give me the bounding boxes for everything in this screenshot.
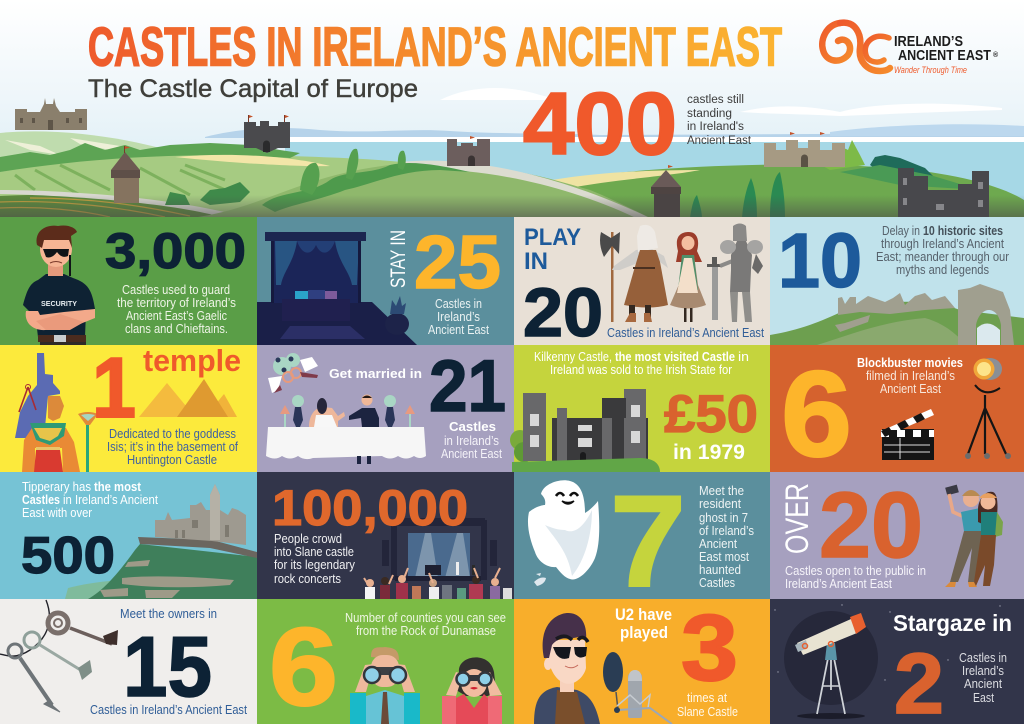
- icon: four-poster bed: [257, 232, 417, 345]
- icon: dark castle: [244, 115, 290, 153]
- text: meet the ghost: resident: [699, 497, 741, 511]
- trees: right: [812, 140, 865, 170]
- icon: mid castle: [447, 136, 490, 166]
- label: U2 have played: played: [620, 623, 668, 642]
- stat: 400 castles: in Ireland's: [687, 121, 744, 133]
- panel: stay in 25: [257, 217, 514, 345]
- icon: woman with binoculars: [442, 657, 502, 724]
- text: number of counties: from the Rock of Dunamase: [356, 624, 496, 638]
- panel: 7 ghosts: [514, 468, 770, 614]
- text: castles: Castles in: [435, 297, 482, 311]
- text: times at Slane Castle: Slane Castle: [677, 705, 738, 719]
- text: Kilkenny Castle: Ireland was sold to the Irish State for: [550, 363, 732, 377]
- text: castles in ireland's ancient east: Castles in Ireland’s Ancient East: [607, 326, 764, 340]
- stat: 400 castles: 400: [523, 74, 677, 173]
- text: delay in historic sites: 10 historic sites: [923, 224, 1003, 238]
- stat: 20: 20: [523, 274, 603, 351]
- text: number of counties: Number of counties you can see: [345, 611, 506, 625]
- logo: ®: [993, 51, 999, 59]
- hill: back left: [0, 131, 170, 175]
- clouds: [440, 88, 1002, 116]
- text: people crowd: People crowd: [274, 532, 342, 546]
- icon: maid: [670, 232, 706, 322]
- hedges: top: [0, 143, 300, 172]
- illustration: ruins on hill: [770, 284, 1024, 345]
- text: delay in historic sites: [876, 224, 1009, 277]
- icon: film light on tripod: [965, 358, 1011, 459]
- text: delay in historic sites: Delay in: [882, 224, 920, 238]
- stat: 1: 1: [92, 341, 136, 436]
- text: blockbuster movies: [857, 356, 963, 396]
- label: temple: temple: [143, 343, 241, 378]
- stat: 100,000: 100,000: [272, 480, 468, 536]
- text: Tipperary has the most: East with over: [22, 506, 92, 520]
- icon: studio microphone: [614, 670, 672, 724]
- panel: 6 blockbuster movies: [770, 345, 1024, 482]
- text: dedicated to Isis: [107, 427, 238, 467]
- icon: dark tower right: [651, 165, 681, 218]
- logo: [822, 23, 999, 75]
- text: people crowd: for its legendary: [274, 558, 356, 572]
- text: castles in ireland's: Castles: [449, 419, 496, 434]
- text: people crowd: rock concerts: [274, 572, 341, 586]
- stat: 21: 21: [429, 346, 506, 427]
- text: castles: Ireland’s: [437, 310, 480, 324]
- panel: 3,000 castles: [0, 217, 257, 345]
- text: castles in ireland's: [959, 651, 1007, 705]
- label: stay in: STAY IN: [387, 230, 410, 288]
- panel: 6 counties: [257, 599, 514, 724]
- logo: Wander Through Time: [894, 65, 967, 75]
- text: guard territory: Castles used to guard: [122, 283, 230, 297]
- text: meet the owners: Meet the owners in: [120, 607, 217, 621]
- stat: 400 castles: Ancient East: [687, 135, 752, 147]
- stat: 20: 20: [819, 473, 923, 577]
- illustration: concert stage and crowd: [364, 518, 512, 599]
- hill: right: [545, 164, 1024, 218]
- text: castles in ireland's ancient east: Castles in Ireland’s Ancient East: [90, 703, 247, 717]
- panel: meet the owners 15: [0, 599, 257, 724]
- stat: 15: 15: [123, 620, 212, 715]
- text: delay in historic sites: through Ireland’s Ancient: [881, 237, 1004, 251]
- text: times at Slane Castle: [677, 691, 738, 719]
- label: play in: [524, 224, 581, 275]
- text: meet the ghost: haunted: [699, 563, 741, 577]
- text: castles in ireland's: Ireland’s: [962, 664, 1004, 678]
- text: times at Slane Castle: times at: [687, 691, 727, 705]
- icon: clapperboard: [881, 409, 934, 460]
- label: U2 have played: U2 have: [615, 605, 672, 624]
- text: Kilkenny Castle: the most visited Castle: [615, 350, 735, 364]
- subtitle: The Castle Capital of Europe: [88, 75, 418, 103]
- text: blockbuster movies: filmed in Ireland’s: [866, 369, 955, 383]
- text: Kilkenny Castle: in: [738, 350, 749, 364]
- text: guard territory: clans and Chieftains.: [125, 322, 228, 336]
- text: dedicated to Isis: Huntington Castle: [127, 453, 217, 467]
- panel: get married in 21: [257, 345, 514, 472]
- stat: 3: 3: [681, 595, 738, 700]
- text: castles in ireland's: Castles in: [959, 651, 1007, 665]
- icon: tourist couple selfie: [945, 485, 1003, 587]
- stat: 3,000: 3,000: [105, 223, 246, 279]
- panel: 10 historic sites: [770, 217, 1024, 345]
- text: guard territory: the territory of Ireland’s: [117, 296, 236, 310]
- text: Kilkenny Castle: Kilkenny Castle,: [534, 350, 612, 364]
- text: Tipperary has the most: Tipperary has: [22, 480, 91, 494]
- panel: 100,000 concert: [257, 472, 514, 599]
- icon: large dark castle: [898, 168, 989, 218]
- icon: brown tower: [111, 146, 140, 203]
- text: blockbuster movies: Blockbuster movies: [857, 356, 963, 370]
- text: castles: [428, 297, 489, 337]
- text: people crowd: [274, 532, 356, 586]
- label: play in: IN: [524, 248, 548, 275]
- text: meet the ghost: ghost in 7: [699, 511, 748, 525]
- hill: centre: [190, 163, 650, 218]
- text: castles in ireland's: East: [973, 691, 994, 705]
- icon: wedding bouquet and doves: [268, 353, 318, 393]
- text: castles: Ancient East: [428, 323, 489, 337]
- icon: beige castle: [764, 132, 845, 167]
- text: Kilkenny Castle: [534, 350, 749, 377]
- text: Tipperary has the most: [22, 480, 158, 520]
- panel: 1 temple: [0, 341, 257, 472]
- text: castles in ireland's: Ancient East: [441, 447, 502, 461]
- stat: 400 castles: [523, 74, 752, 173]
- text: meet the ghost: East most: [699, 550, 749, 564]
- text: meet the ghost: [699, 484, 754, 590]
- text: blockbuster movies: Ancient East: [880, 382, 941, 396]
- text: number of counties: [345, 611, 506, 638]
- icon: man with binoculars: [350, 647, 420, 724]
- stat: 400 castles: standing: [687, 108, 732, 120]
- text: meet the ghost: Ancient: [699, 537, 737, 551]
- text: delay in historic sites: myths and legends: [896, 263, 989, 277]
- icon: ghost: [528, 480, 599, 586]
- text: castles open to the public: Castles open to the public in: [785, 564, 926, 578]
- icon: knight with sword: [707, 224, 763, 322]
- text: meet the ghost: of Ireland’s: [699, 524, 754, 538]
- hill: mid left: [0, 155, 480, 218]
- logo: ANCIENT EAST: [898, 48, 991, 64]
- stat: 500: 500: [21, 527, 115, 585]
- label: over: OVER: [779, 483, 815, 554]
- logo: IRELAND’S: [894, 34, 963, 50]
- icon: security guard: [23, 225, 95, 345]
- icon: rock singer: [534, 613, 623, 724]
- text: dedicated to Isis: Dedicated to the goddess: [109, 427, 236, 441]
- panel: header landscape: [0, 0, 1024, 218]
- stat: 400 castles: castles still: [687, 94, 744, 106]
- icon: executioner: [600, 225, 668, 322]
- text: Tipperary has the most: Castles: [22, 493, 60, 507]
- label: stargaze in: Stargaze in: [893, 610, 1012, 636]
- text: castles open to the public: [785, 564, 926, 591]
- illustration: Kilkenny Castle: [510, 389, 660, 472]
- panel: over 20: [770, 472, 1024, 599]
- stat: 25: 25: [414, 220, 501, 304]
- text: castles in ireland's: Ancient: [964, 677, 1002, 691]
- text: Tipperary has the most: in Ireland’s Ancient: [63, 493, 158, 507]
- text: Tipperary has the most: the most: [94, 480, 142, 494]
- trees: centre: [300, 149, 406, 195]
- illustration: wedding couple at table: [266, 394, 426, 464]
- icon: telescope: [784, 611, 878, 719]
- text: guard territory: [117, 283, 236, 336]
- text: dedicated to Isis: Isis; it’s in the basement of: [107, 440, 238, 454]
- panel: Tipperary 500: [0, 472, 257, 599]
- stat: £50: £50: [664, 385, 758, 444]
- hill: bottom left dark field: [0, 195, 240, 218]
- panel: U2 played 3: [514, 595, 770, 724]
- panel: stargaze in 2: [770, 599, 1024, 724]
- sea: [285, 142, 1024, 200]
- stat: 6: 6: [781, 346, 852, 482]
- stat: 10: 10: [778, 218, 862, 304]
- icon: goddess Isis: [15, 353, 98, 472]
- text: meet the ghost: Castles: [699, 576, 735, 590]
- label: get married in: Get married in: [329, 366, 422, 381]
- icon: manor castle: [15, 98, 87, 130]
- illustration: Rock of Cashel: [65, 484, 257, 599]
- icon: bunch of keys: [0, 600, 118, 712]
- text: delay in historic sites: East; meander through our: [876, 250, 1009, 264]
- label: play in: PLAY: [524, 224, 581, 251]
- panel: Kilkenny £50: [510, 345, 770, 472]
- text: people crowd: into Slane castle: [274, 545, 354, 559]
- text: castles in ireland's: [441, 419, 502, 461]
- icon: security guard: SECURITY: [41, 301, 77, 308]
- text: castles open to the public: Ireland’s Ancient East: [785, 577, 892, 591]
- text: meet the ghost: Meet the: [699, 484, 744, 498]
- stat: 7: 7: [610, 468, 686, 614]
- icon: pyramids: [139, 379, 237, 417]
- panel: play in 20: [514, 217, 770, 351]
- label: in 1979: in 1979: [673, 441, 745, 464]
- text: castles in ireland's: in Ireland’s: [444, 434, 499, 448]
- label: U2 have played: [615, 605, 672, 642]
- text: guard territory: Ancient East’s Gaelic: [126, 309, 227, 323]
